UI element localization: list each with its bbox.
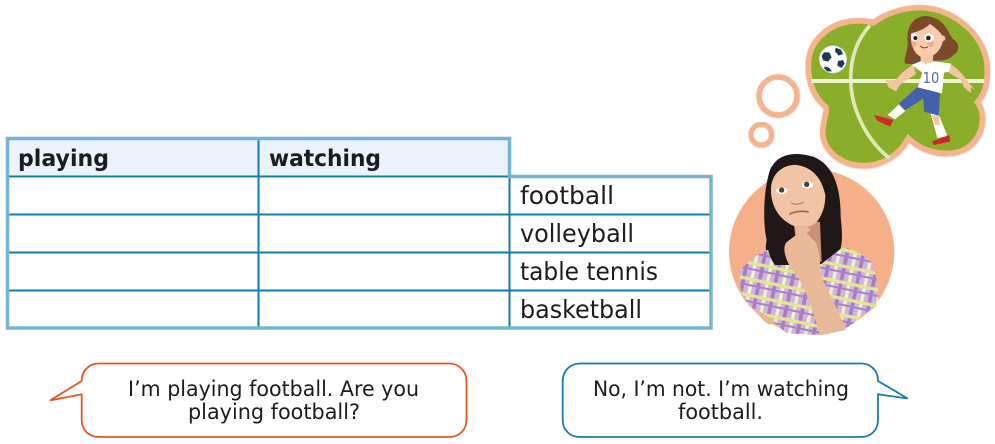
legs [888, 103, 908, 119]
peach circle [729, 169, 894, 334]
shirt [740, 247, 878, 335]
bubble text line 2: football. [678, 400, 763, 424]
neck [921, 55, 933, 64]
mouth [920, 46, 928, 48]
boots [874, 115, 893, 127]
nose and mouth [791, 202, 804, 204]
table grid lines [8, 138, 711, 328]
small thought circle small [751, 124, 772, 145]
neck [794, 222, 822, 263]
knee and calf skin [932, 115, 940, 125]
speech bubble: left [50, 364, 466, 437]
lower arm [757, 312, 773, 325]
row label: volleyball: volleyball [520, 219, 634, 248]
small thought circle large [759, 77, 797, 115]
row label: football: football [520, 181, 614, 210]
girl player [874, 16, 975, 145]
header: playing: playing [18, 146, 109, 172]
face [911, 24, 943, 57]
eyes [776, 187, 787, 194]
thinking woman photo [729, 154, 894, 335]
near arm [885, 65, 916, 91]
bubble text line 1: No, I’m not. I’m watching [593, 377, 849, 401]
speech bubble: right [563, 364, 908, 437]
ear [939, 35, 945, 41]
far arm [947, 63, 975, 93]
field lines [811, 25, 984, 158]
forearm and hand [784, 226, 846, 335]
header: watching: watching [269, 146, 381, 172]
cloud with football field [808, 8, 987, 166]
cheeks [911, 41, 917, 47]
hair back [764, 155, 842, 265]
shirt number: 10 [923, 69, 939, 87]
face [771, 165, 825, 228]
row label: basketball: basketball [520, 295, 642, 324]
table: activity grid [8, 138, 711, 328]
fringe [769, 154, 827, 195]
shirt [912, 61, 951, 93]
thought bubble illustration [751, 8, 987, 166]
hair [905, 16, 958, 64]
bubble text line 2: playing football? [188, 400, 360, 424]
football [819, 46, 847, 73]
shorts [899, 86, 940, 116]
hair strand over shoulder [767, 220, 788, 265]
row label: table tennis: table tennis [520, 257, 658, 286]
bubble text line 1: I’m playing football. Are you [128, 377, 419, 401]
table header row [8, 138, 510, 176]
eyes [911, 33, 917, 41]
